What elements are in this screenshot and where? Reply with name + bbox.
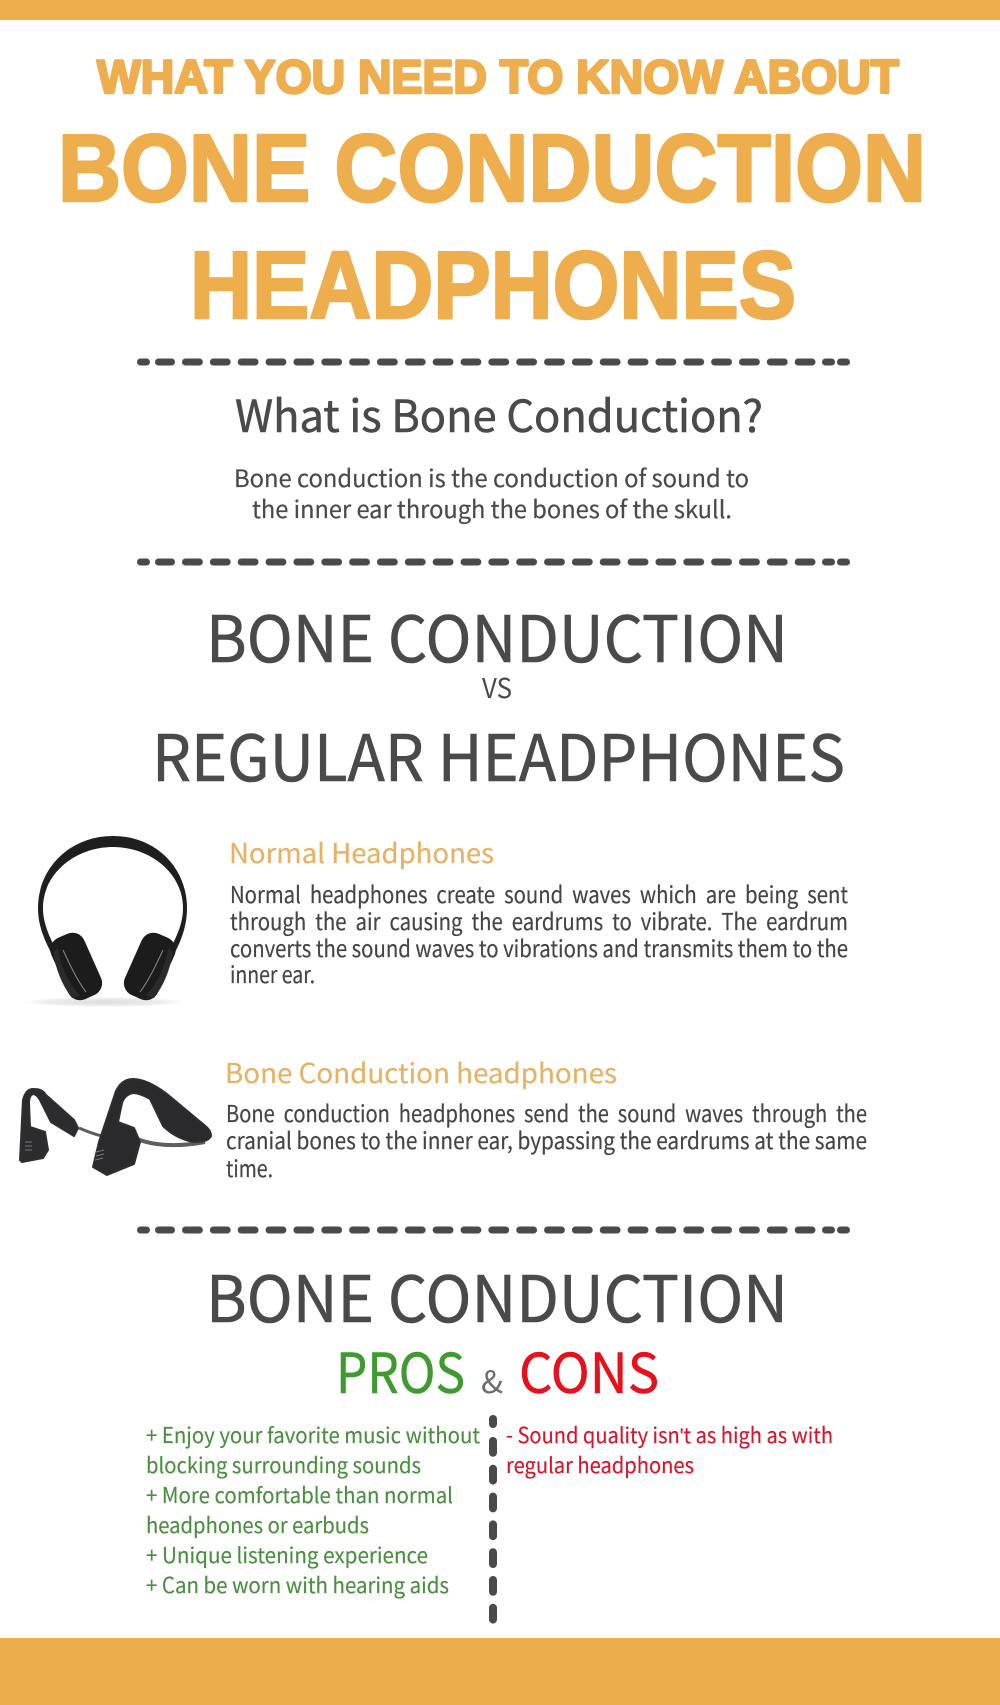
bottom orange bar bbox=[0, 1638, 1000, 1705]
label: pros: PROS bbox=[336, 1329, 465, 1409]
top orange bar bbox=[0, 0, 1000, 20]
text block: normal headphones bbox=[229, 832, 848, 990]
heading: bone conduction vs regular headphones: REGULAR HEADPHONES bbox=[152, 708, 845, 800]
body: normal headphones: inner ear. bbox=[230, 956, 315, 990]
heading: bone conduction vs regular headphones bbox=[152, 589, 845, 800]
body: normal headphones: Normal headphones create sound waves which are being sent bbox=[230, 876, 848, 910]
list: pros: + Enjoy your favorite music without bbox=[146, 1419, 480, 1450]
list: pros bbox=[146, 1419, 480, 1600]
icon: bone conduction headphones bbox=[20, 1079, 211, 1175]
label: cons: CONS bbox=[519, 1329, 659, 1409]
definition text: Bone conduction is the conduction of sound to bbox=[234, 459, 749, 494]
body: normal headphones: through the air causing the eardrums to vibrate. The eardrum bbox=[230, 903, 848, 937]
body: bone conduction headphones: Bone conduction headphones send the sound waves through the bbox=[226, 1095, 867, 1129]
section: what is bone conduction bbox=[234, 381, 763, 525]
title line: headphones: HEADPHONES bbox=[190, 232, 796, 339]
body: bone conduction headphones: time. bbox=[226, 1150, 273, 1184]
definition text bbox=[234, 459, 749, 525]
title bbox=[58, 50, 926, 339]
label: ampersand: & bbox=[481, 1357, 503, 1402]
list: pros: blocking surrounding sounds bbox=[146, 1449, 421, 1480]
heading: what is bone conduction: What is Bone Conduction? bbox=[235, 381, 763, 445]
list: pros: + Unique listening experience bbox=[146, 1539, 428, 1570]
body: normal headphones bbox=[230, 876, 848, 990]
text block: bone conduction headphones bbox=[225, 1052, 867, 1184]
list: pros: + Can be worn with hearing aids bbox=[146, 1569, 449, 1600]
icon: over-ear headphones bbox=[22, 836, 187, 1007]
vertical dashed divider bbox=[489, 1419, 497, 1620]
definition text: the inner ear through the bones of the skull. bbox=[252, 490, 732, 525]
heading: bone conduction vs regular headphones: VS bbox=[482, 667, 512, 706]
title line: bone conduction: BONE CONDUCTION bbox=[58, 115, 926, 222]
list: cons bbox=[506, 1419, 833, 1480]
body: bone conduction headphones bbox=[226, 1095, 867, 1184]
body: bone conduction headphones: cranial bones to the inner ear, bypassing the eardrums at the same bbox=[226, 1122, 867, 1156]
heading: bone conduction pros and cons bbox=[206, 1249, 788, 1409]
subheading: normal headphones: Normal Headphones bbox=[229, 832, 494, 871]
subheading: bone conduction headphones: Bone Conduction headphones bbox=[225, 1052, 617, 1091]
list: pros: headphones or earbuds bbox=[146, 1509, 369, 1540]
heading: bone conduction vs regular headphones: BONE CONDUCTION bbox=[206, 589, 788, 681]
list: pros: + More comfortable than normal bbox=[146, 1479, 453, 1510]
heading: bone conduction pros and cons: BONE CONDUCTION bbox=[206, 1249, 788, 1341]
list: cons: regular headphones bbox=[506, 1449, 694, 1480]
list: cons: - Sound quality isn't as high as with bbox=[506, 1419, 833, 1450]
title line: what you need to know about: WHAT YOU NEED TO KNOW ABOUT bbox=[97, 50, 899, 103]
body: normal headphones: converts the sound waves to vibrations and transmits them to the bbox=[230, 930, 848, 964]
